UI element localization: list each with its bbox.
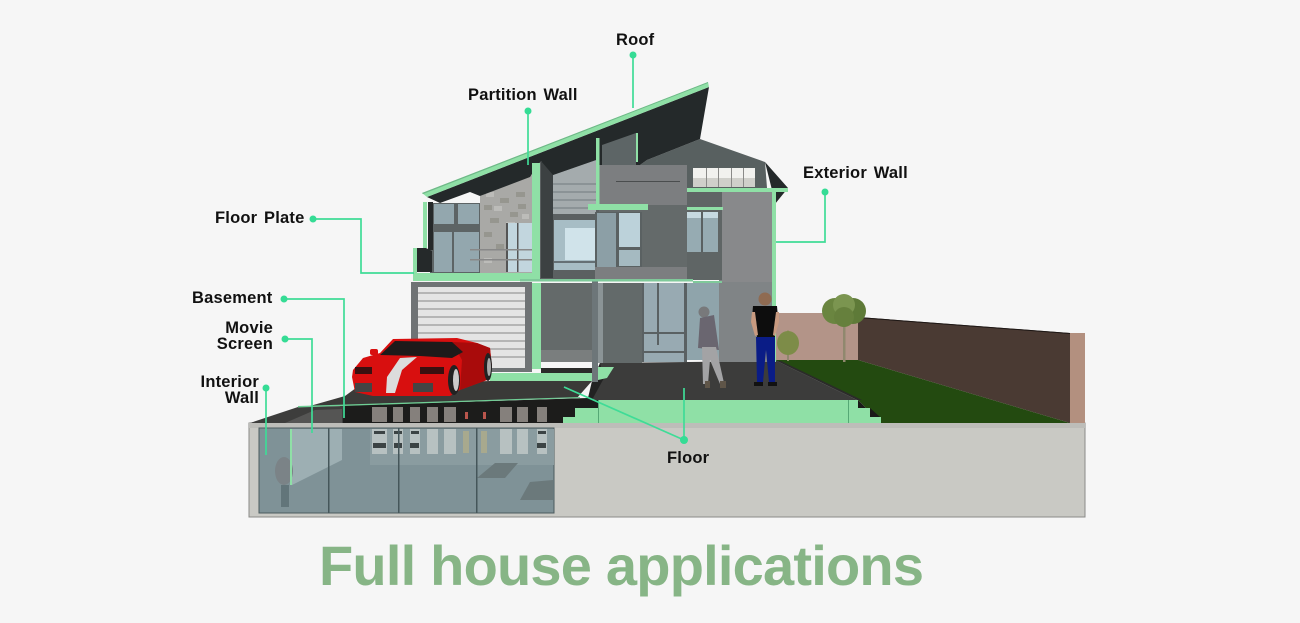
house: ground floor: [411, 278, 775, 382]
leader: exterior wall: [776, 188, 828, 242]
person: man: [751, 292, 779, 386]
label: roof: Roof: [616, 31, 655, 49]
label: partition wall: Partition Wall: [468, 86, 578, 104]
house: upper floor left: [417, 175, 532, 273]
label: movie screen: Movie: [225, 319, 273, 337]
driveway and basement facade: [250, 381, 598, 423]
house: upper floor centre: [540, 160, 599, 280]
label: floor: Floor: [667, 449, 710, 467]
leader: floor: [564, 387, 688, 444]
label: interior wall: Interior: [201, 373, 259, 391]
title: Full house applications: [319, 534, 924, 597]
car: [352, 338, 492, 396]
ground block: [249, 423, 1085, 517]
label: floor plate: Floor Plate: [215, 209, 304, 227]
tree: small: [777, 330, 799, 361]
house: upper floor right: [595, 139, 788, 282]
tree: large: [822, 294, 866, 362]
dark roof underside: [427, 87, 709, 203]
leader: floor plate: [310, 216, 414, 273]
roof window: [602, 133, 636, 165]
leader: partition wall: [524, 108, 532, 165]
label: interior wall: Wall: [225, 389, 259, 407]
terrace deck: [588, 361, 862, 400]
leader: interior wall: [262, 384, 270, 455]
back garden wall: [775, 313, 1085, 423]
person: woman: [698, 306, 726, 388]
label: exterior wall: Exterior Wall: [803, 164, 908, 182]
leader: basement: [280, 296, 344, 418]
floor slab: [563, 400, 881, 423]
leader: movie screen: [282, 336, 312, 433]
lawn: [775, 360, 1070, 423]
green section cuts: [413, 82, 788, 362]
basement section: [259, 428, 554, 513]
label: basement: Basement: [192, 289, 273, 307]
leader: roof: [630, 52, 636, 108]
label: movie screen: Screen: [217, 335, 273, 353]
